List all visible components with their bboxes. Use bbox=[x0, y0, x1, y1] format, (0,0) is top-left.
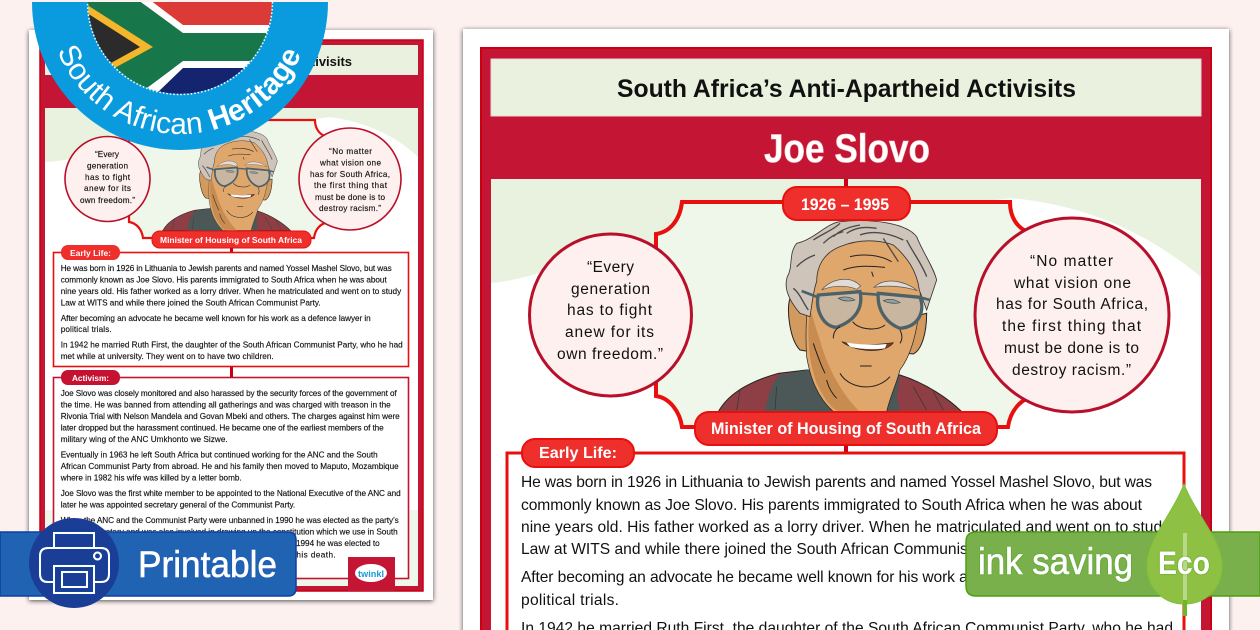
early life text: Law at WITS and while there joined the South African Communist Party. bbox=[521, 541, 1016, 558]
small portrait bbox=[163, 130, 290, 231]
small quote right: what vision one bbox=[319, 158, 381, 168]
small early life text: He was born in 1926 in Lithuania to Jewish parents and named Yossel Mashel Slovo, but was bbox=[61, 264, 392, 273]
panel: large poster preview bbox=[463, 29, 1229, 630]
small early life text: nine years old. His father worked as a lorry driver. When he matriculated and went on to study bbox=[61, 287, 402, 296]
small poster title bar: South Africa’s Anti-Apartheid Activisits bbox=[111, 54, 352, 69]
small connector stem bbox=[230, 248, 233, 253]
panel: small poster preview bbox=[29, 30, 433, 600]
small quote left: generation bbox=[87, 162, 128, 170]
small activism text: Joe Slovo was the first white member to be appointed to the National Executive of the ANC and bbox=[61, 489, 401, 498]
quote bubble left: generation bbox=[571, 281, 650, 298]
small activism text: later he was appointed secretary general of the Communist Party. bbox=[61, 500, 295, 510]
early life text: After becoming an advocate he became well known for his work as a defence lawyer in bbox=[521, 569, 1112, 586]
small activism text: Minister of Housing, a position he held until shortly before his death. bbox=[61, 550, 336, 560]
small quote right: destroy racism.” bbox=[319, 204, 381, 213]
date pill bbox=[783, 187, 910, 220]
quote bubble right: the first thing that bbox=[1002, 318, 1142, 335]
small quote left bbox=[65, 136, 150, 222]
large poster sheet bbox=[463, 29, 1229, 630]
eco label: Eco bbox=[1158, 545, 1210, 581]
small poster title bar bbox=[45, 45, 418, 75]
role pill bbox=[695, 412, 997, 445]
quote bubble left bbox=[530, 234, 692, 396]
small activism text: later dropped but the harassment continued. He became one of the earliest members of the bbox=[61, 424, 384, 432]
small activism label bbox=[61, 370, 120, 385]
quote bubble left: “Every bbox=[587, 259, 634, 276]
small poster content background bbox=[45, 108, 418, 586]
small quote left: anew for its bbox=[84, 184, 131, 193]
small activism box bbox=[54, 367, 408, 578]
small activism text: where in 1982 his wife was killed by a letter bomb. bbox=[60, 474, 242, 482]
early life box bbox=[507, 439, 1184, 630]
large poster title bar bbox=[491, 59, 1201, 116]
small activism text: military wing of the ANC Umkhonto we Sizwe. bbox=[61, 435, 228, 444]
badge: South African Heritage bbox=[32, 2, 328, 150]
small quote left: own freedom.” bbox=[80, 196, 135, 205]
name heading: Joe Slovo: Joe Slovo bbox=[764, 127, 930, 171]
small early life label: Early Life: bbox=[70, 249, 111, 258]
small quote left: has to fight bbox=[85, 173, 131, 182]
quote bubble left: has to fight bbox=[567, 302, 653, 319]
icon circle bbox=[29, 518, 119, 608]
small activism text: Rivonia Trial with Nelson Mandela and Govan Mbeki and others. The charges against him were bbox=[61, 412, 400, 421]
badge label: ink saving bbox=[978, 541, 1133, 582]
small early life text bbox=[61, 264, 403, 361]
small early life text: met while at university. They went on to have two children. bbox=[61, 352, 274, 361]
quote bubble left: anew for its bbox=[565, 324, 654, 341]
portrait frame bbox=[656, 202, 1036, 427]
small role pill: Minister of Housing of South Africa bbox=[160, 235, 302, 245]
quote bubble right: destroy racism.” bbox=[1012, 362, 1131, 379]
small role pill bbox=[152, 231, 311, 248]
flag dotted edge bbox=[88, 0, 272, 94]
small activism text bbox=[60, 389, 401, 560]
connector stem bbox=[230, 367, 233, 377]
small activism label: Activism: bbox=[72, 374, 109, 383]
small early life text: In 1942 he married Ruth First, the daughter of the South African Communist Party, who he had bbox=[61, 340, 403, 350]
role pill: Minister of Housing of South Africa bbox=[711, 420, 982, 438]
large poster crimson border bbox=[481, 48, 1211, 630]
small activism text: African Communist Party from abroad. He and his family then moved to Maputo, Mozambique bbox=[61, 462, 399, 471]
early life label bbox=[522, 439, 634, 467]
small poster crimson border bbox=[40, 40, 423, 591]
early life text bbox=[521, 474, 1173, 630]
small quote left: “Every bbox=[95, 150, 120, 159]
large poster content background bbox=[491, 179, 1201, 630]
quote bubble right: “No matter bbox=[1030, 253, 1113, 270]
small activism text: Africa today. He served in the first democratic government and in 1994 he was elected to bbox=[61, 539, 380, 548]
portrait: Joe Slovo bbox=[718, 221, 962, 412]
badge: ink saving eco bbox=[966, 484, 1260, 616]
large poster title: South Africa’s Anti-Apartheid Activisits bbox=[617, 75, 1076, 103]
badge text: South African Heritage bbox=[60, 46, 300, 134]
small early life text: commonly known as Joe Slovo. His parents immigrated to South Africa when he was about bbox=[61, 276, 387, 284]
small early life box bbox=[54, 245, 408, 366]
small quote right: has for South Africa, bbox=[310, 170, 390, 179]
badge label: Printable bbox=[138, 544, 277, 585]
small early life text: political trials. bbox=[61, 325, 112, 334]
small early life text: Law at WITS and while there joined the South African Communist Party. bbox=[61, 298, 321, 308]
early life text: nine years old. His father worked as a lorry driver. When he matriculated and went on to study bbox=[521, 519, 1170, 536]
icon: printer bbox=[40, 533, 109, 593]
small activism text: Eventually in 1963 he left South Africa but continued working for the ANC and the South bbox=[61, 450, 378, 460]
quote bubble right: must be done is to bbox=[1004, 340, 1139, 357]
badge: Printable bbox=[0, 518, 296, 608]
small portrait frame bbox=[129, 120, 329, 238]
small quote right: the first thing that bbox=[314, 181, 388, 190]
small quote right: must be done is to bbox=[315, 193, 385, 202]
small activism text: the time. He was banned from attending all gatherings and was charged with treason in the bbox=[61, 400, 391, 410]
early life text: commonly known as Joe Slovo. His parents immigrated to South Africa when he was about bbox=[521, 497, 1143, 514]
quote bubble right: has for South Africa, bbox=[996, 296, 1148, 313]
date pill: 1926 – 1995 bbox=[801, 196, 889, 214]
small early life text: After becoming an advocate he became well known for his work as a defence lawyer in bbox=[61, 314, 371, 323]
small quote right: “No matter bbox=[329, 147, 372, 156]
icon: leaf drop bbox=[1147, 484, 1222, 616]
small activism text: Joe Slovo was closely monitored and also harassed by the security forces of the government of bbox=[61, 389, 397, 398]
small activism text: general secretary and was also involved in drawing up the constitution which we use in South bbox=[61, 528, 398, 536]
small activism text: When the ANC and the Communist Party were unbanned in 1990 he was elected as the party’s bbox=[61, 516, 399, 525]
quote bubble right: what vision one bbox=[1013, 275, 1131, 292]
small early life label bbox=[61, 245, 120, 260]
early life label: Early Life: bbox=[539, 445, 617, 462]
twinkl logo bbox=[348, 557, 395, 591]
quote bubble right bbox=[975, 218, 1169, 412]
early life text: He was born in 1926 in Lithuania to Jewish parents and named Yossel Mashel Slovo, but was bbox=[521, 474, 1152, 491]
early life text: political trials. bbox=[521, 592, 619, 609]
twinkl logo: twinkl bbox=[358, 569, 384, 580]
small poster sheet bbox=[29, 30, 433, 600]
icon: South African flag bbox=[88, 2, 272, 94]
quote bubble left: own freedom.” bbox=[557, 346, 663, 363]
small quote right bbox=[299, 128, 401, 230]
